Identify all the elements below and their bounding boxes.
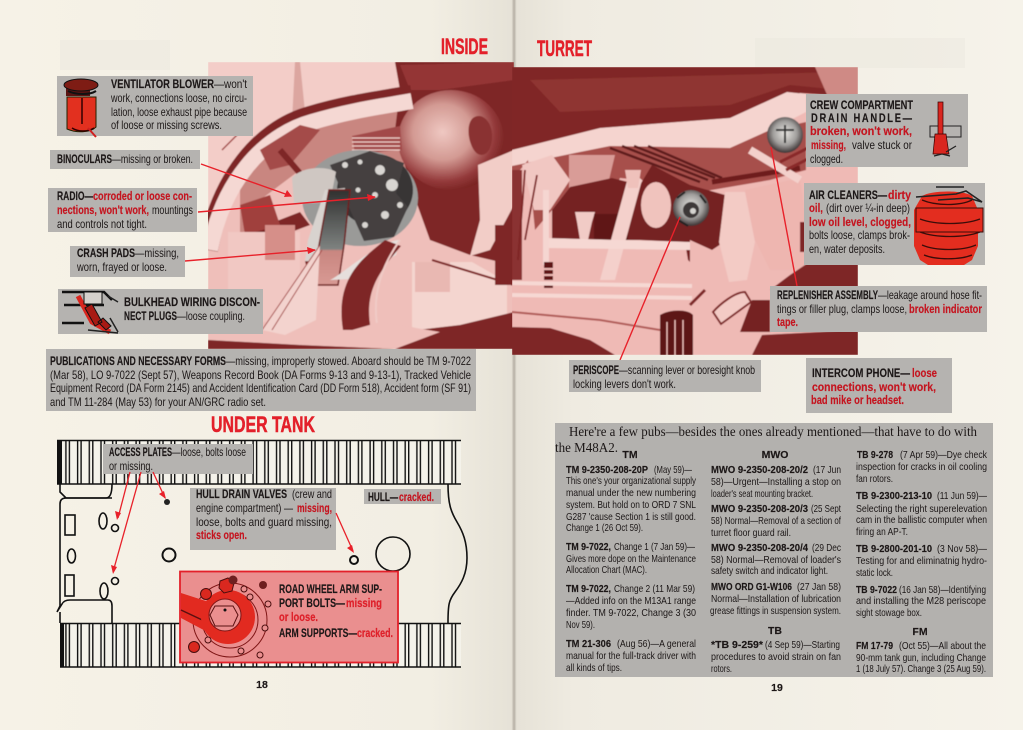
panel: replenisher assembly <box>770 286 987 332</box>
column: MWO and TB: (27 Jan 58) <box>797 581 841 593</box>
panel: hull drain valves: loose, bolts and guard missing, <box>196 515 332 529</box>
panel: road wheel arm support bolts: missing <box>346 596 382 610</box>
panel: air cleaners: dirty <box>888 188 911 202</box>
column: TB and FM: TB 9-7022 <box>856 584 897 596</box>
panel: publications and necessary forms: Equipment Record (DA Form 2145) and Accident Identification Card (DD Form 518), Accident form (SF 91) <box>50 381 471 395</box>
track: bottom <box>60 623 461 667</box>
column: TM: Change 1 (26 Oct 59). <box>566 522 643 534</box>
panel: air cleaners <box>804 183 985 265</box>
column: TM: TM 9-7022, <box>566 583 611 595</box>
panel: hull drain valves: HULL DRAIN VALVES <box>196 487 287 501</box>
panel: replenisher assembly: broken indicator <box>909 302 982 316</box>
panel: access plates: or missing. <box>109 459 153 473</box>
panel: ventilator blower: —won't <box>214 77 248 91</box>
column: MWO and TB: (4 Sep 59)—Starting <box>765 639 840 651</box>
heading: TURRET: TURRET <box>537 36 592 61</box>
panel: crew compartment drain handle: DRAIN HANDLE— <box>811 112 912 125</box>
panel: hull drain valves: (crew and <box>292 487 332 501</box>
panel: replenisher assembly: tings or filler plug, clamps loose, <box>777 302 907 316</box>
arrows: photo callout leaders <box>185 147 797 360</box>
column: MWO and TB: turret floor guard rail. <box>711 527 791 539</box>
column: TM: TM <box>622 449 638 461</box>
panel: replenisher assembly: —leakage around hose fit- <box>878 288 982 302</box>
panel: intercom phone: INTERCOM PHONE— <box>812 366 910 380</box>
column: TB and FM: firing an AP-T. <box>856 526 908 538</box>
column: MWO and TB: MWO 9-2350-208-20/2 <box>711 464 808 476</box>
icon: ventilator blower <box>64 79 98 137</box>
column: MWO and TB: 58)—Urgent—Installing a stop on <box>711 476 841 488</box>
column: TM: finder. TM 9-7022, Change 3 (30 <box>566 607 696 619</box>
column: TM: TM 21-306 <box>566 638 611 650</box>
track: top <box>57 440 461 484</box>
panel: intercom phone <box>806 358 952 413</box>
column: MWO and TB: *TB 9-259* <box>711 639 764 651</box>
column: TB and FM: Testing for and eliminatnig hydro- <box>856 555 987 567</box>
panel: air cleaners: AIR CLEANERS— <box>809 188 887 202</box>
column: MWO and TB: 58) Normal—Removal of loader's <box>711 554 841 566</box>
panel: periscope: —scanning lever or boresight knob <box>619 363 755 377</box>
show-through ghost marks <box>60 38 965 70</box>
column: TB and FM: (3 Nov 58)— <box>937 543 987 555</box>
panel: ventilator blower <box>57 76 253 137</box>
panel: road wheel arm support bolts: cracked. <box>357 626 393 640</box>
panel: road wheel arm support bolts: or loose. <box>279 610 318 624</box>
panel: hull: cracked. <box>399 490 434 504</box>
panel: crew compartment drain handle: clogged. <box>810 152 843 166</box>
heading: INSIDE: INSIDE <box>441 34 488 59</box>
column: TM: TM 9-7022, <box>566 541 611 553</box>
panel: publications and necessary forms <box>46 349 476 411</box>
column: TB and FM: (16 Jan 58)—Identifying <box>899 584 986 596</box>
panel: hull drain valves <box>190 487 336 550</box>
panel: replenisher assembly: tape. <box>777 315 798 329</box>
panel: periscope: locking levers don't work. <box>573 377 676 391</box>
panel: access plates <box>103 444 253 474</box>
column: TM: G287 'cause Section 1 is still good. <box>566 511 696 523</box>
heading: UNDER TANK: UNDER TANK <box>211 412 315 437</box>
panel: intercom phone: loose <box>912 366 937 380</box>
panel: publications and necessary forms: and TM 11-284 (May 53) for your AN/GRC radio set. <box>50 395 266 409</box>
column: TB and FM: inspection for cracks in oil cooling <box>856 461 987 473</box>
column: TM: Allocation Chart (MAC). <box>566 564 647 576</box>
column: TM: system. But hold on to ORD 7 SNL <box>566 499 696 511</box>
column: MWO and TB: MWO 9-2350-208-20/3 <box>711 503 808 515</box>
panel: intercom phone: bad mike or headset. <box>811 393 904 407</box>
page number 19: 19 <box>771 682 783 694</box>
panel: binoculars <box>50 150 200 169</box>
panel: air cleaners: en, water deposits. <box>809 242 885 256</box>
icon: bulkhead wiring plugs <box>62 292 118 333</box>
panel: crew compartment drain handle <box>806 94 968 167</box>
panel: binoculars: BINOCULARS <box>57 152 112 166</box>
panel: air cleaners: (dirt over ¼-in deep) <box>826 201 910 215</box>
column: TB and FM: cam in the ballistic computer when <box>856 514 987 526</box>
panel: bulkhead wiring <box>58 289 263 334</box>
column: MWO and TB: safety switch and indicator light. <box>711 565 828 577</box>
column: TB and FM: FM <box>912 626 928 638</box>
panel: radio: corroded or loose con- <box>93 189 192 203</box>
column: MWO and TB: MWO ORD G1-W106 <box>711 581 792 593</box>
column: MWO and TB: Normal—Installation of lubrication <box>711 593 841 605</box>
column: MWO and TB: (17 Jun <box>813 464 841 476</box>
panel: radio <box>48 188 197 232</box>
column: MWO and TB: rotors. <box>711 663 732 675</box>
intro text: the M48A2. <box>555 440 618 455</box>
panel: radio: RADIO— <box>57 189 93 203</box>
column: MWO and TB: procedures to avoid strain on fan <box>711 651 841 663</box>
column: TB and FM: (7 Apr 59)—Dye check <box>900 449 988 461</box>
column: TB and FM: (Oct 55)—All about the <box>899 640 986 652</box>
hull outline <box>57 484 467 623</box>
column: MWO and TB: loader's seat mounting bracket. <box>711 488 813 500</box>
panel: crew compartment drain handle: broken, won't work, <box>810 124 912 138</box>
column: TB and FM: Selecting the right superelevation <box>856 503 987 515</box>
panel: road wheel arm support bolts: ARM SUPPORTS— <box>279 626 357 640</box>
intro text: Here're a few pubs—besides the ones already mentioned—that have to do with <box>569 424 977 439</box>
column: TM: (May 59)— <box>654 464 692 476</box>
column: MWO and TB: 58) Normal—Removal of a section of <box>711 515 841 527</box>
panel: road wheel arm support bolts: ROAD WHEEL ARM SUP- <box>279 582 382 596</box>
panel: publications and necessary forms: (Mar 58), LO 9-7022 (Sept 57), Weapons Record Book (DA Forms 9-13 and 9-13-1), Tracked Vehicle <box>50 368 471 382</box>
panel: periscope <box>569 360 761 392</box>
panel: air cleaners: low oil level, clogged, <box>809 215 911 229</box>
column: TM: —Added info on the M13A1 range <box>566 595 696 607</box>
column: TM: Gives more dope on the Maintenance <box>566 553 696 565</box>
panel: radio: nections, won't work, <box>57 203 149 217</box>
panel: crew compartment drain handle: CREW COMPARTMENT <box>810 98 914 112</box>
panel: crash pads <box>70 246 185 277</box>
panel: crew compartment drain handle: valve stuck or <box>852 138 912 152</box>
panel: hull drain valves: sticks open. <box>196 528 247 542</box>
column: TB and FM: TB 9-278 <box>857 449 893 461</box>
diagram: tank underside <box>57 440 467 667</box>
panel: intercom phone: connections, won't work, <box>812 380 936 394</box>
column: TB and FM: (11 Jun 59)— <box>937 490 987 502</box>
panel: bulkhead wiring: NECT PLUGS <box>124 309 177 323</box>
column: TB and FM: static lock. <box>856 567 893 579</box>
column: TM: Change 2 (11 Mar 59) <box>614 583 695 595</box>
column: TB and FM: and installing the M28 periscope <box>856 595 986 607</box>
photo: turret interior left half <box>208 62 514 349</box>
panel: hull <box>364 489 441 504</box>
panel: ventilator blower: lation, loose exhaust pipe because <box>111 105 247 119</box>
column: TM: (Aug 56)—A general <box>617 638 696 650</box>
panel: crash pads: worn, frayed or loose. <box>76 260 167 274</box>
arrows: under tank leaders <box>111 472 354 574</box>
column: TM: all kinds of tips. <box>566 662 622 674</box>
panel: bulkhead wiring: BULKHEAD WIRING DISCON- <box>124 295 260 309</box>
page number 18: 18 <box>256 679 268 691</box>
panel: bulkhead wiring: —loose coupling. <box>177 309 245 323</box>
panel: air cleaners: oil, <box>809 201 823 215</box>
bottom dark areas <box>512 327 615 355</box>
column: TB and FM: sight stowage box. <box>856 607 922 619</box>
column: TB and FM: 90-mm tank gun, including Change <box>856 652 986 664</box>
panel: radio: mountings <box>152 203 193 217</box>
panel: crash pads: —missing, <box>135 246 179 260</box>
intro text <box>555 424 977 455</box>
photo: turret interior right half <box>512 67 858 355</box>
panel: ventilator blower: work, connections loose, no circu- <box>110 91 247 105</box>
panel: road wheel arm support bolts <box>180 572 398 662</box>
column: MWO and TB: MWO <box>762 449 788 461</box>
column: TM: Change 1 (7 Jan 59)— <box>614 541 695 553</box>
panel: ventilator blower: VENTILATOR BLOWER <box>111 77 214 91</box>
column: TB and FM: fan rotors. <box>856 473 893 485</box>
column: TM: TM 9-2350-208-20P <box>566 464 648 476</box>
panel: radio: and controls not tight. <box>57 217 147 231</box>
panel: crew compartment drain handle: missing, <box>811 138 846 152</box>
column: MWO and TB: (25 Sept <box>811 503 841 515</box>
column: TB and FM: FM 17-79 <box>856 640 893 652</box>
panel: access plates: —loose, bolts loose <box>172 445 246 459</box>
panel: publications list <box>555 423 993 677</box>
column: TB and FM: TB 9-2800-201-10 <box>856 543 932 555</box>
panel: periscope: PERISCOPE <box>573 363 619 377</box>
panel: binoculars: —missing or broken. <box>112 152 193 166</box>
panel: ventilator blower: of loose or missing screws. <box>111 118 222 132</box>
panel: publications and necessary forms: PUBLICATIONS AND NECESSARY FORMS <box>50 354 226 368</box>
panel: hull drain valves: missing, <box>297 501 332 515</box>
panel: air cleaners: bolts loose, clamps brok- <box>809 228 910 242</box>
icon: road wheel arm hub <box>181 576 271 658</box>
column: MWO and TB: MWO 9-2350-208-20/4 <box>711 542 808 554</box>
column: MWO and TB: grease fittings in suspension system. <box>710 605 841 617</box>
panel: access plates: ACCESS PLATES <box>109 445 172 459</box>
column: TM: Nov 59). <box>566 619 595 631</box>
column: TM <box>566 449 697 674</box>
icon: drain handle <box>930 102 961 156</box>
panel: crash pads: CRASH PADS <box>77 246 135 260</box>
column: TM: manual for the full-track driver with <box>566 650 696 662</box>
panel: replenisher assembly: REPLENISHER ASSEMBLY <box>777 288 878 302</box>
panel: hull drain valves: engine compartment) — <box>196 501 293 515</box>
pale horizontal beam <box>546 238 690 250</box>
dark central mass <box>552 165 727 262</box>
dark band under pale strip <box>512 122 806 230</box>
column: TM: manual under the new numbering <box>566 487 696 499</box>
panel: publications and necessary forms: —missing, improperly stowed. Aboard should be TM 9-7022 <box>226 354 471 368</box>
column: TB and FM: TB 9-2300-213-10 <box>856 490 932 502</box>
column: TB and FM <box>856 449 988 675</box>
icon: air cleaner canister <box>914 187 983 265</box>
panel: road wheel arm support bolts: PORT BOLTS— <box>279 596 345 610</box>
column: MWO and TB: (29 Dec <box>812 542 841 554</box>
column: MWO and TB <box>710 449 841 675</box>
panel: hull: HULL— <box>368 490 398 504</box>
column: MWO and TB: TB <box>768 625 782 637</box>
column: TM: This one's your organizational supply <box>566 475 697 487</box>
